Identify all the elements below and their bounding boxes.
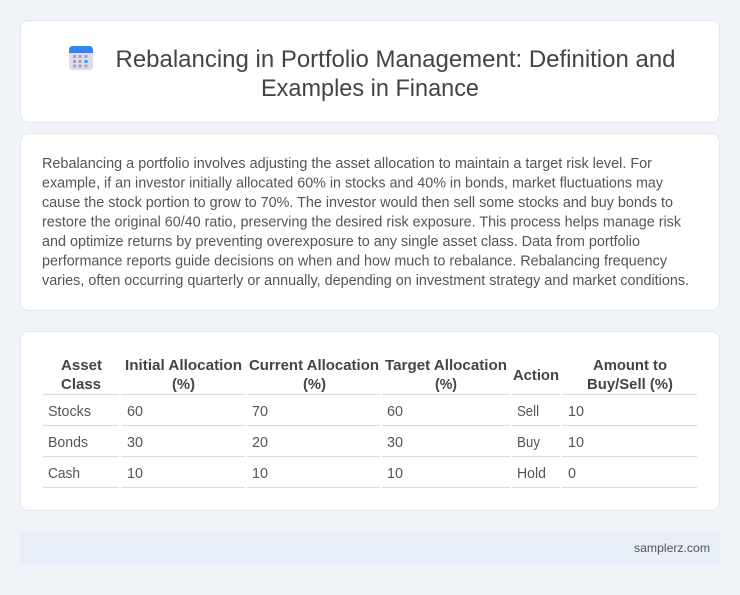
- table row: cash: [48, 466, 576, 482]
- text block: description paragraph: varies, often occurring quarterly or annually, depending on investment strategy and market conditions.: [42, 273, 689, 289]
- table header row: Initial Allocation: [125, 357, 242, 374]
- table row: stocks: [48, 404, 584, 420]
- text block: description paragraph: Rebalancing a portfolio involves adjusting the asset allocation to maintain a target risk level. For: [42, 156, 652, 172]
- table header row: Class: [61, 376, 101, 393]
- title: [116, 46, 676, 102]
- title: Examples in Finance: [261, 75, 479, 102]
- table row: stocks: Sell: [517, 404, 539, 420]
- table row: stocks: 70: [252, 404, 268, 420]
- table row: bonds: 30: [127, 435, 143, 451]
- table header row: (%): [435, 376, 457, 393]
- table header row: Action: [513, 367, 559, 384]
- table row: bonds: 10: [568, 435, 584, 451]
- title: Rebalancing in Portfolio Management: Definition and: [116, 46, 676, 73]
- table header row: [61, 357, 673, 393]
- text block: description paragraph: and optimize returns by preventing overexposure to any single asset class. Data from portfolio: [42, 234, 640, 250]
- table row: bonds: Buy: [517, 435, 541, 451]
- table row: bonds: Bonds: [48, 435, 88, 451]
- table row: stocks: 60: [387, 404, 403, 420]
- table header row: Buy/Sell (%): [587, 376, 673, 393]
- table row: cash: 10: [252, 466, 268, 482]
- table row: stocks: 10: [568, 404, 584, 420]
- panel: header: [20, 20, 720, 122]
- table header row: (%): [303, 376, 326, 393]
- table row: cash: Cash: [48, 466, 80, 482]
- text block: description paragraph: example, if an investor initially allocated 60% in stocks and 40% in bonds, market fluctuations may: [42, 176, 664, 192]
- table row: stocks: 60: [127, 404, 143, 420]
- footer credit: samplerz.com: [634, 541, 710, 555]
- panel: description: [20, 134, 720, 310]
- table row: cash: 10: [387, 466, 403, 482]
- table header row: Current Allocation: [249, 357, 379, 374]
- table row: cash: 0: [568, 466, 576, 482]
- table row: bonds: [48, 435, 584, 451]
- text block: description paragraph: [42, 156, 689, 289]
- text block: description paragraph: performance reports guide decisions on when and how much to rebalance. Rebalancing frequency: [42, 254, 668, 270]
- text block: description paragraph: restore the original 60/40 ratio, preserving the desired risk exposure. This process helps manage risk: [42, 214, 682, 230]
- panel: allocation table: [20, 332, 720, 510]
- table row: bonds: 30: [387, 435, 403, 451]
- table header row: Asset: [61, 357, 102, 374]
- table header row: Amount to: [593, 357, 667, 374]
- table header row: (%): [172, 376, 195, 393]
- table row: stocks: Stocks: [48, 404, 91, 420]
- table row: cash: Hold: [517, 466, 546, 482]
- text block: description paragraph: cause the stock portion to grow to 70%. The investor would then sell some stocks and buy bonds to: [42, 195, 673, 211]
- footer bar: [20, 531, 720, 565]
- table header row: Target Allocation: [385, 357, 507, 374]
- table row: bonds: 20: [252, 435, 268, 451]
- table row: cash: 10: [127, 466, 143, 482]
- icon: calendar: [69, 46, 93, 70]
